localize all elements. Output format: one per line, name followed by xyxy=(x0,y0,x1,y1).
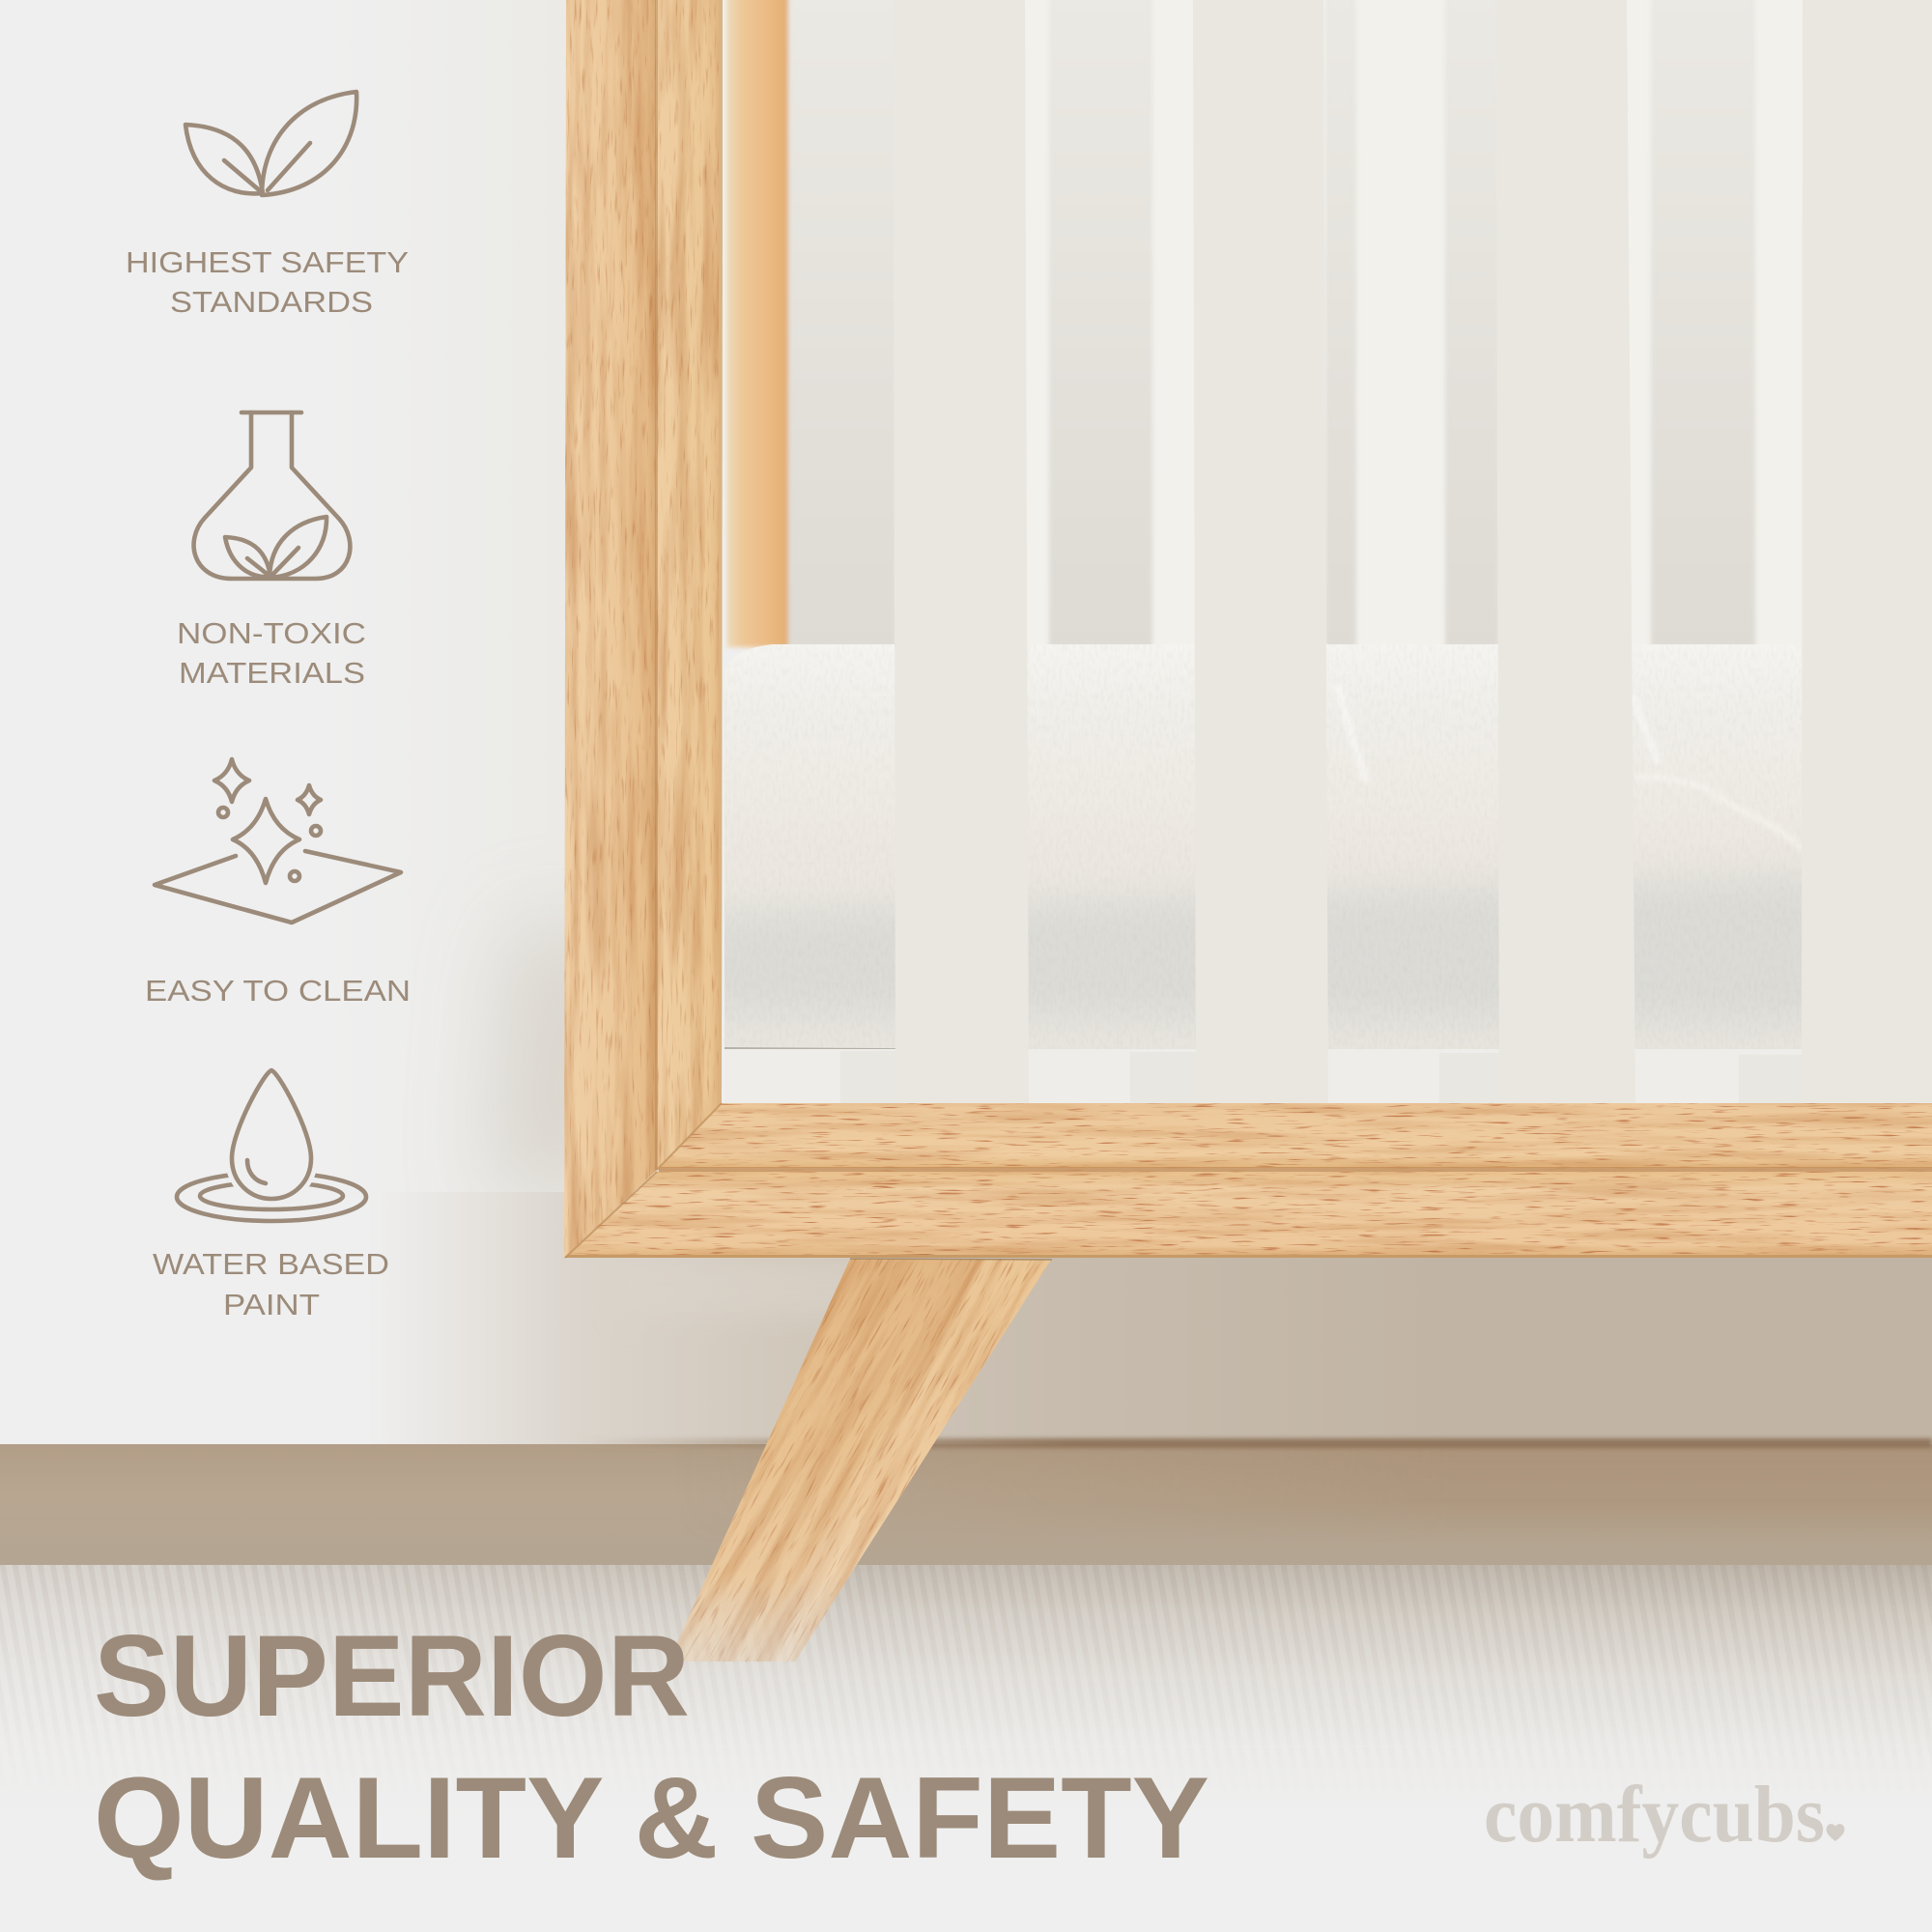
brand logo: comfycubs xyxy=(1484,1770,1825,1860)
icon: leaves xyxy=(185,92,356,195)
crib leg xyxy=(676,1259,1051,1662)
rug xyxy=(0,1565,1932,1756)
label: non-toxic materials xyxy=(177,616,366,690)
mattress xyxy=(696,638,1826,1063)
label: non-toxic materials: MATERIALS xyxy=(179,656,365,690)
crib back rail, wall and slats seen through the front xyxy=(724,0,1932,647)
lower white rail of the crib xyxy=(724,1049,1806,1105)
icon: flask with leaves xyxy=(194,412,350,579)
title xyxy=(94,1611,1209,1883)
title: SUPERIOR xyxy=(94,1611,690,1741)
crib frame: vertical post xyxy=(564,0,724,1261)
label: water based paint: WATER BASED xyxy=(153,1247,389,1281)
front slats xyxy=(894,0,1932,1104)
label: water based paint xyxy=(153,1247,389,1321)
label: non-toxic materials: NON-TOXIC xyxy=(177,616,366,650)
label: highest safety standards: STANDARDS xyxy=(170,285,373,319)
icon: water drop with ripples xyxy=(177,1070,366,1221)
label: highest safety standards xyxy=(126,245,409,319)
icon: sparkling surface xyxy=(155,759,401,923)
label: highest safety standards: HIGHEST SAFETY xyxy=(126,245,409,279)
label: easy to clean: EASY TO CLEAN xyxy=(145,974,411,1008)
crib frame: horizontal rail xyxy=(564,1103,1932,1260)
label: water based paint: PAINT xyxy=(223,1288,320,1321)
title: QUALITY & SAFETY xyxy=(94,1753,1209,1883)
floor xyxy=(0,1438,1932,1570)
